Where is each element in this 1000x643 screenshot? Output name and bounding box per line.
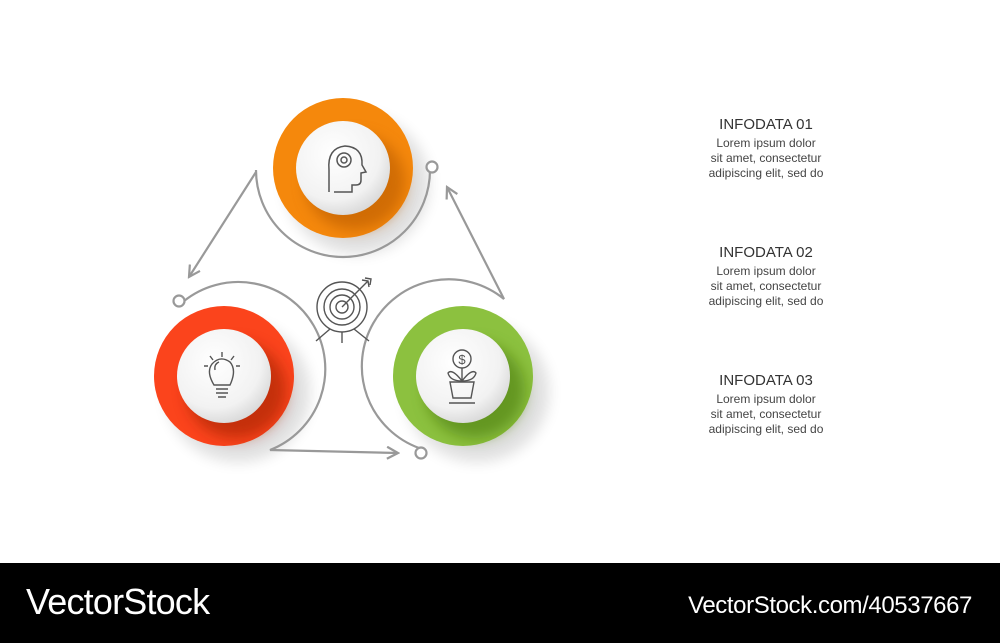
arrows and arcs [174,162,504,458]
text block: infodata 03: Lorem ipsum dolor [716,392,816,406]
text block: infodata 03 [709,372,823,436]
text block: infodata 02: sit amet, consectetur [711,279,821,293]
text block: infodata 02: Lorem ipsum dolor [716,264,816,278]
text block: infodata 02 [709,244,823,308]
text block: infodata 01 [709,116,823,180]
text block: infodata 03: sit amet, consectetur [711,407,821,421]
text block: infodata 01: adipiscing elit, sed do [709,166,823,180]
footer bar [0,563,1000,643]
icon: light bulb [204,352,240,397]
icon: money plant: $ [458,352,466,367]
text block: infodata 01: Lorem ipsum dolor [716,136,816,150]
footer url: VectorStock.com/40537667 [688,592,972,619]
step circle: green [393,306,549,462]
step circle: orange [273,98,429,254]
text block: infodata 02: INFODATA 02 [719,244,813,261]
icon: target [316,278,371,343]
icon: money plant [448,350,476,403]
text block: infodata 03: adipiscing elit, sed do [709,422,823,436]
text block: infodata 01: sit amet, consectetur [711,151,821,165]
text block: infodata 02: adipiscing elit, sed do [709,294,823,308]
footer logo: VectorStock [26,581,209,622]
text block: infodata 03: INFODATA 03 [719,372,813,389]
icon: head with gear [329,146,366,192]
text block: infodata 01: INFODATA 01 [719,116,813,133]
step circle: red [154,306,310,462]
